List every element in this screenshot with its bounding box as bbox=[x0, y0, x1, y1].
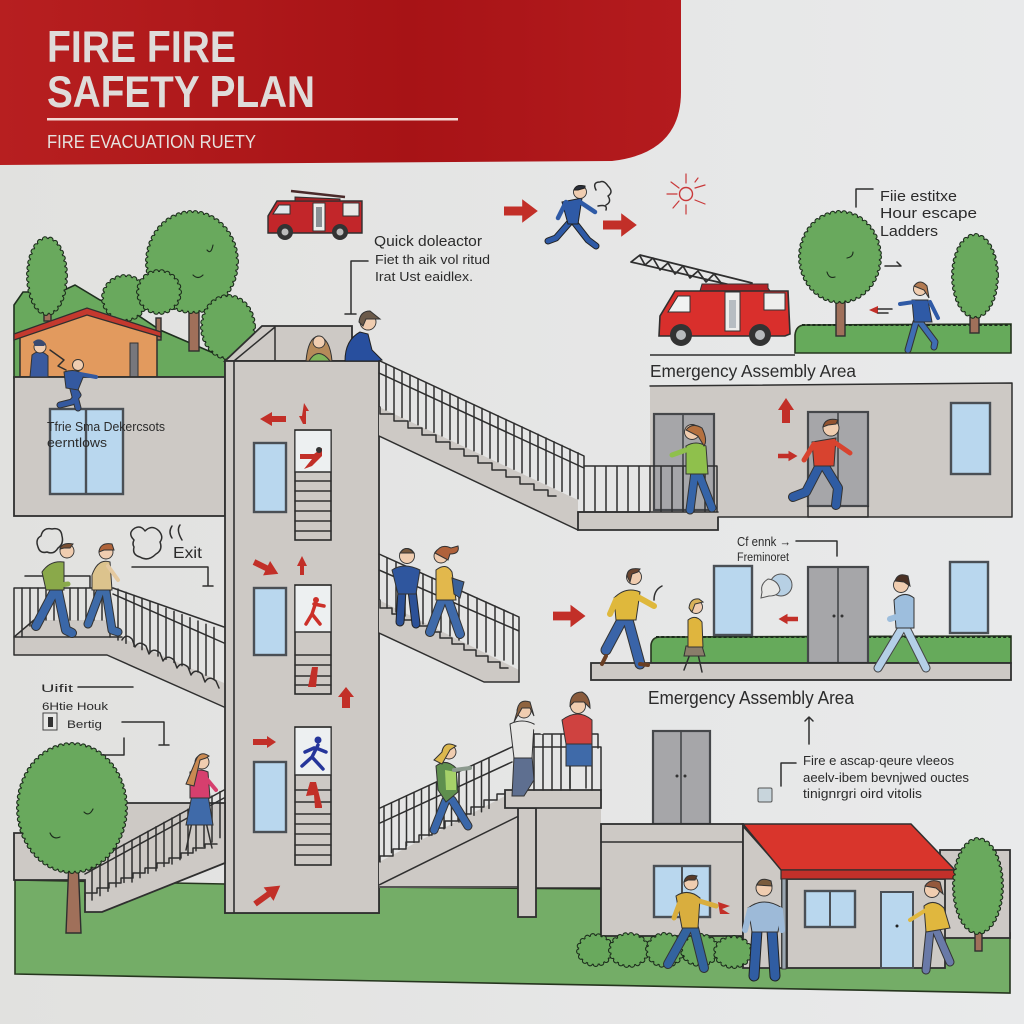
small fire truck bbox=[268, 191, 362, 240]
tower stair panel 3 bbox=[295, 727, 331, 865]
man in light blue standing bbox=[745, 879, 782, 976]
woman in green at door bbox=[672, 424, 712, 510]
label: quick detector: Quick doleactor bbox=[374, 234, 482, 250]
label: detectors: eerntlows bbox=[47, 436, 107, 450]
label: utility block bbox=[41, 683, 169, 755]
label: quick detector: Fiet th aik vol ritud bbox=[375, 252, 490, 267]
man in light blue walking bbox=[878, 575, 926, 668]
right hedge with trees bbox=[795, 213, 1011, 353]
heading: emergency assembly area (upper): Emergency Assembly Area bbox=[650, 361, 856, 381]
man in green on landing bbox=[36, 544, 74, 633]
lower-right building and red-roof house bbox=[601, 824, 1010, 969]
railing at landing bbox=[578, 466, 718, 512]
icon: smoke puffs bbox=[595, 182, 611, 210]
running person on roof edge bbox=[60, 360, 96, 408]
small tree at far right bbox=[955, 840, 1001, 951]
label: utility block: Bertig bbox=[67, 719, 102, 731]
upper-right stair bbox=[379, 361, 718, 530]
label: fire escape ladders: Ladders bbox=[880, 224, 938, 240]
woman in red on low stair bbox=[562, 692, 592, 788]
label: quick detector: Irat Ust eaidlex. bbox=[375, 269, 473, 284]
label: detectors: Tfrie Sma Dekercsots bbox=[47, 420, 165, 434]
header banner: FIRE FIRE bbox=[47, 23, 236, 72]
label: fire escape note: aeelv-ibem bevnjwed ouctes bbox=[803, 771, 969, 785]
label: fire escape ladders: Fiie estitxe bbox=[880, 189, 957, 205]
tower stair panel 1 bbox=[295, 430, 331, 540]
top running man bbox=[548, 186, 596, 246]
icon: smoke clouds and exit label: Exit bbox=[173, 545, 203, 562]
label: fire escape note: Fire e ascap·qeure vleeos bbox=[803, 754, 954, 768]
label: check freshener bbox=[737, 534, 837, 564]
label: fire escape ladders bbox=[856, 189, 977, 240]
upper-right building wall bbox=[650, 383, 1012, 517]
label: utility block: 6Htie Houk bbox=[42, 701, 109, 713]
man in yellow near door bbox=[910, 881, 950, 970]
label: check freshener: Cf ennk → bbox=[737, 534, 791, 549]
icon: speech bubble smoke bbox=[761, 574, 792, 598]
man in yellow walking on walkway bbox=[602, 569, 662, 665]
label: check freshener: Freminoret bbox=[737, 552, 790, 564]
girl in green on low stair bbox=[434, 744, 470, 830]
upper-left building bbox=[14, 377, 225, 516]
child in yellow dress bbox=[684, 599, 705, 672]
icon: sun bbox=[667, 174, 705, 214]
label: quick detector bbox=[345, 234, 490, 314]
woman with tan shirt on landing bbox=[88, 544, 118, 632]
label: utility block: Uifit bbox=[41, 683, 73, 695]
tower stair panel 2 bbox=[295, 585, 331, 694]
ground lawn bbox=[15, 880, 1010, 993]
roof-top double door bbox=[653, 731, 710, 824]
label: fire escape ladders: Hour escape bbox=[880, 206, 977, 222]
girl in navy on lawn bbox=[869, 262, 938, 350]
man in yellow pointing at alarm bbox=[668, 875, 730, 968]
tree at lower left bbox=[19, 745, 125, 933]
central tower parapet and shaft bbox=[225, 326, 379, 913]
header banner bbox=[0, 0, 681, 165]
low-right stair and platform bbox=[379, 734, 601, 917]
header banner: SAFETY PLAN bbox=[47, 68, 315, 117]
tower windows bbox=[254, 443, 286, 832]
upper-left landing stair bbox=[14, 576, 224, 707]
shrubs bbox=[579, 935, 750, 966]
girl in pink on lower stair bbox=[186, 754, 216, 850]
person on roof: girl bbox=[306, 336, 332, 361]
mid-right stair bbox=[379, 554, 519, 682]
low-left stair bbox=[14, 790, 225, 912]
person in doorway of house bbox=[30, 339, 66, 377]
label: fire escape note bbox=[758, 717, 969, 802]
icon: smoke clouds and exit label bbox=[37, 525, 213, 586]
large fire truck with ladder bbox=[631, 255, 790, 346]
person on roof: man in navy bbox=[345, 311, 382, 361]
person in navy on stair bbox=[392, 548, 420, 624]
mid-right walkway building bbox=[591, 562, 1011, 680]
woman in white on low stair bbox=[510, 701, 542, 796]
heading: emergency assembly area (lower): Emergency Assembly Area bbox=[648, 688, 855, 708]
woman in yellow on stair bbox=[430, 546, 464, 634]
header banner: FIRE EVACUATION RUETY bbox=[47, 131, 256, 152]
label: detectors bbox=[47, 420, 165, 450]
label: fire escape note: tinignrgri oird vitolis bbox=[803, 787, 922, 801]
top-left trees and house scene bbox=[14, 213, 253, 378]
direction arrows bbox=[250, 199, 798, 911]
man in red running out door bbox=[793, 419, 850, 505]
